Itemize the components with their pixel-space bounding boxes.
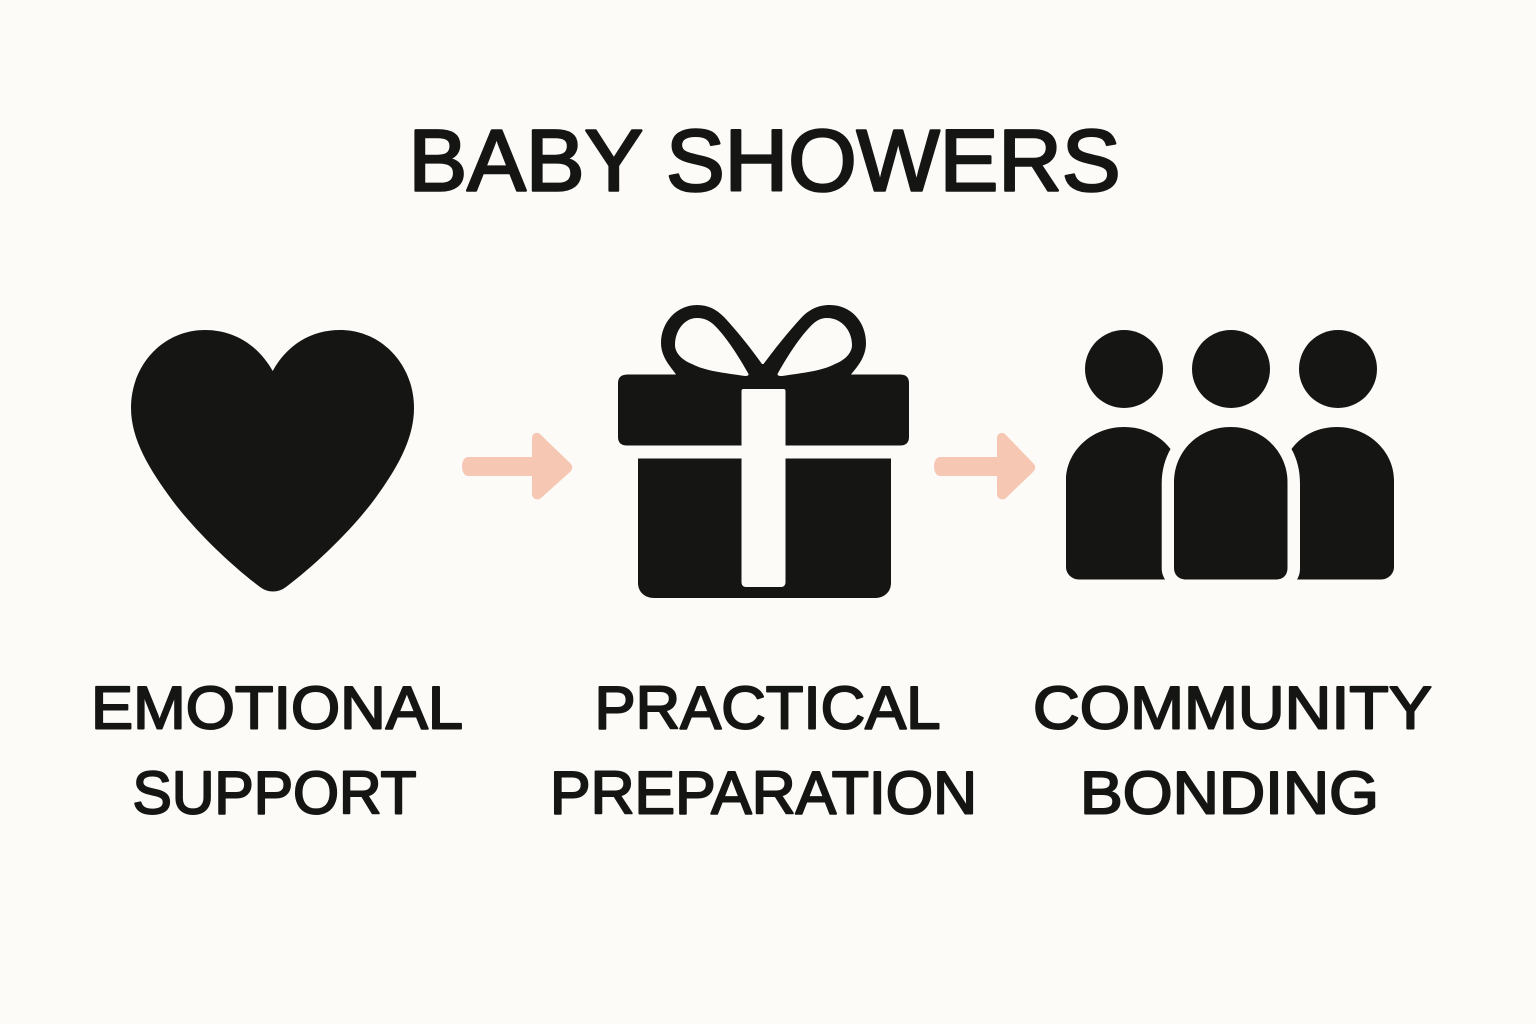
label: practical preparation — [550, 674, 977, 826]
title: BABY SHOWERS — [408, 112, 1120, 210]
person left — [1066, 330, 1170, 580]
icon: gift box — [618, 305, 909, 598]
person centre — [1174, 330, 1288, 580]
icon: three people — [1066, 330, 1394, 580]
label: emotional support: SUPPORT — [132, 758, 416, 826]
label: community bonding: BONDING — [1080, 758, 1379, 826]
arrow: heart to gift — [462, 433, 572, 499]
label: community bonding: COMMUNITY — [1033, 674, 1432, 742]
label: emotional support: EMOTIONAL — [91, 674, 463, 742]
label: practical preparation: PRACTICAL — [594, 674, 940, 742]
gift lid and bow — [618, 305, 909, 446]
label: emotional support — [91, 674, 463, 826]
arrow: gift to community — [934, 433, 1035, 499]
person right — [1292, 330, 1394, 580]
label: community bonding — [1033, 674, 1432, 826]
label: practical preparation: PREPARATION — [550, 758, 977, 826]
icon: heart — [131, 330, 414, 592]
gift body — [638, 458, 891, 598]
